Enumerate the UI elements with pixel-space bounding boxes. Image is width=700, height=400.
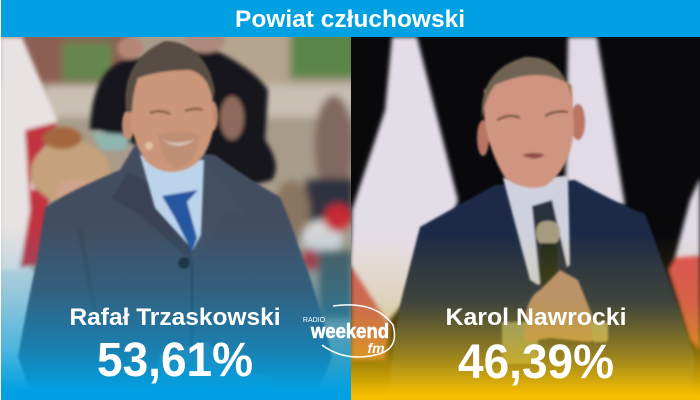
head [477,57,585,188]
title: Powiat człuchowski [235,6,465,33]
result: Trzaskowski: 53,61% [97,334,253,387]
result: Nawrocki: 46,39% [458,336,614,389]
flag [0,37,58,400]
suit [388,180,695,400]
hand and cuff [502,270,608,364]
yellow gradient overlay [351,235,700,400]
logo: Radio Weekend FM: weekend [310,321,389,343]
candidate name: Trzaskowski: Rafał Trzaskowski [70,304,280,331]
white-red flags [350,37,700,360]
child in black behind [90,29,276,188]
panel: Trzaskowski photo [0,29,360,400]
head [122,41,218,172]
logo: Radio Weekend FM: RADIO [303,317,326,324]
candidate name: Nawrocki: Karol Nawrocki [446,304,626,331]
photo background [0,30,360,400]
panel: Nawrocki photo [350,37,700,400]
title bar [1,0,700,37]
logo: Radio Weekend FM: fm [367,340,385,356]
shirt and tie [140,155,204,252]
coat [18,145,332,400]
crowd woman [30,127,110,206]
logo: Radio Weekend FM [303,305,395,357]
blue gradient overlay [1,225,351,400]
shirt, tie, microphone [503,176,570,287]
